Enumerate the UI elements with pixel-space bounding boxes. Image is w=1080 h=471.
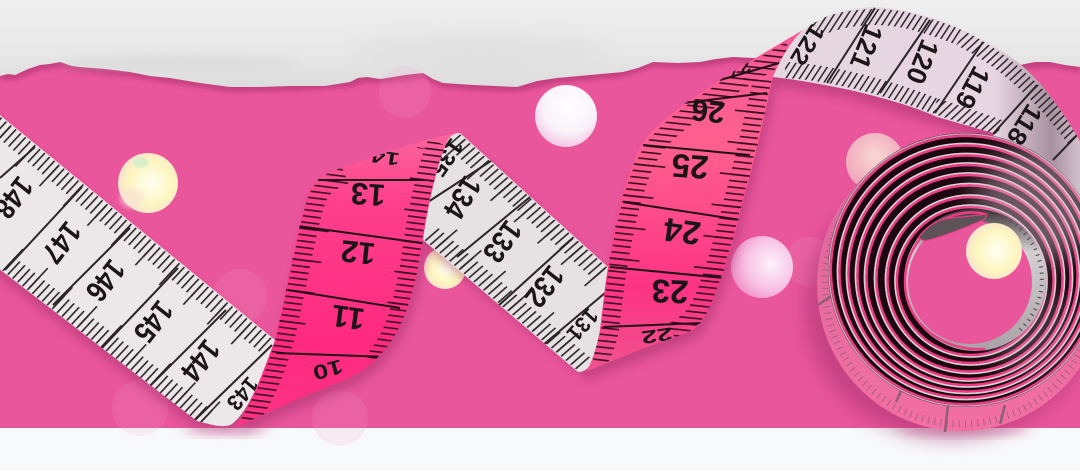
- bubble: cream left: [118, 153, 178, 213]
- numbers 143-148: 144: [174, 333, 227, 388]
- major dividers: [428, 157, 605, 350]
- coil hole: [908, 220, 1032, 344]
- faint bokeh circles: [112, 66, 835, 446]
- bubble: pink right of tape: [731, 236, 793, 298]
- numbers 143-148: 145: [127, 294, 180, 349]
- inner wall ticks: [1000, 215, 1042, 330]
- coil shadow: [805, 170, 1080, 440]
- numbers 22-26: 25: [670, 147, 710, 186]
- ruler ticks: [598, 50, 790, 362]
- major dividers: [603, 60, 790, 327]
- bubble: behind mid tape: [424, 247, 466, 289]
- numbers 22-26: 24: [661, 211, 703, 252]
- numbers 131-135: 135: [424, 133, 469, 181]
- numbers 143-148: [0, 170, 264, 416]
- major dividers: [276, 180, 425, 357]
- coil inner wall: [904, 209, 1046, 351]
- numbers 118-122: 120: [900, 35, 945, 88]
- background: white bottom strip: [0, 428, 1080, 471]
- ruler ticks: [785, 17, 1075, 140]
- numbers 118-122: 122: [785, 19, 829, 69]
- numbers 131-135: [436, 138, 598, 340]
- tape segment: pink 22-26: [580, 25, 810, 375]
- numbers 10-14: 12: [339, 233, 377, 272]
- numbers 10-14: [314, 152, 399, 379]
- numbers 131-135: 131: [562, 303, 603, 346]
- numbers 131-135: 133: [476, 214, 529, 269]
- numbers 118-122: [790, 24, 1040, 145]
- torn paper shadow: [0, 0, 1080, 92]
- coil of tape: [805, 133, 1080, 440]
- shadows cast on the bottom strip: [180, 424, 1030, 436]
- numbers 22-26: 26: [690, 93, 726, 129]
- numbers 143-148: 146: [79, 253, 132, 308]
- tape segment: white 118-122: [773, 7, 1080, 196]
- major dividers: [827, 8, 1080, 160]
- tape segment: white 143-148: [0, 115, 275, 426]
- tape shadow: [0, 38, 1000, 435]
- numbers 131-135: 132: [518, 259, 571, 314]
- numbers 118-122: 119: [949, 61, 996, 114]
- soft highlight on upper right of the coil: [975, 145, 1080, 375]
- numbers 22-26: 22: [640, 323, 674, 347]
- numbers 131-135: 134: [437, 171, 488, 225]
- coil top dark disc: [828, 133, 1080, 407]
- numbers 22-26: 23: [651, 272, 689, 311]
- bubble: white top: [535, 85, 597, 147]
- major dividers: [0, 147, 272, 420]
- ruler ticks: [0, 123, 269, 420]
- tape end: [918, 214, 987, 241]
- numbers 10-14: 10: [310, 354, 345, 384]
- numbers 118-122: 118: [1001, 99, 1049, 151]
- numbers 143-148: 147: [35, 215, 88, 270]
- numbers 10-14: 11: [329, 298, 367, 337]
- coil side band: [817, 139, 1080, 432]
- ruler ticks: [429, 140, 601, 365]
- torn paper: top strip: [0, 0, 1080, 87]
- numbers 10-14: 13: [350, 176, 386, 213]
- numbers 22-26: 27: [727, 58, 753, 81]
- bubble: pale behind coil: [846, 133, 904, 191]
- numbers 143-148: 143: [221, 372, 264, 416]
- numbers 22-26: [640, 58, 753, 347]
- ruler ticks: [245, 142, 437, 425]
- numbers 118-122: 121: [844, 20, 889, 73]
- coil wound layers: [829, 134, 1080, 406]
- tape segment: white 131-135: [423, 133, 608, 372]
- tape segment: pink 10-13: [235, 133, 456, 427]
- bubble inside coil: [966, 223, 1022, 279]
- numbers 10-14: 14: [369, 145, 401, 170]
- inner rim: [905, 212, 985, 349]
